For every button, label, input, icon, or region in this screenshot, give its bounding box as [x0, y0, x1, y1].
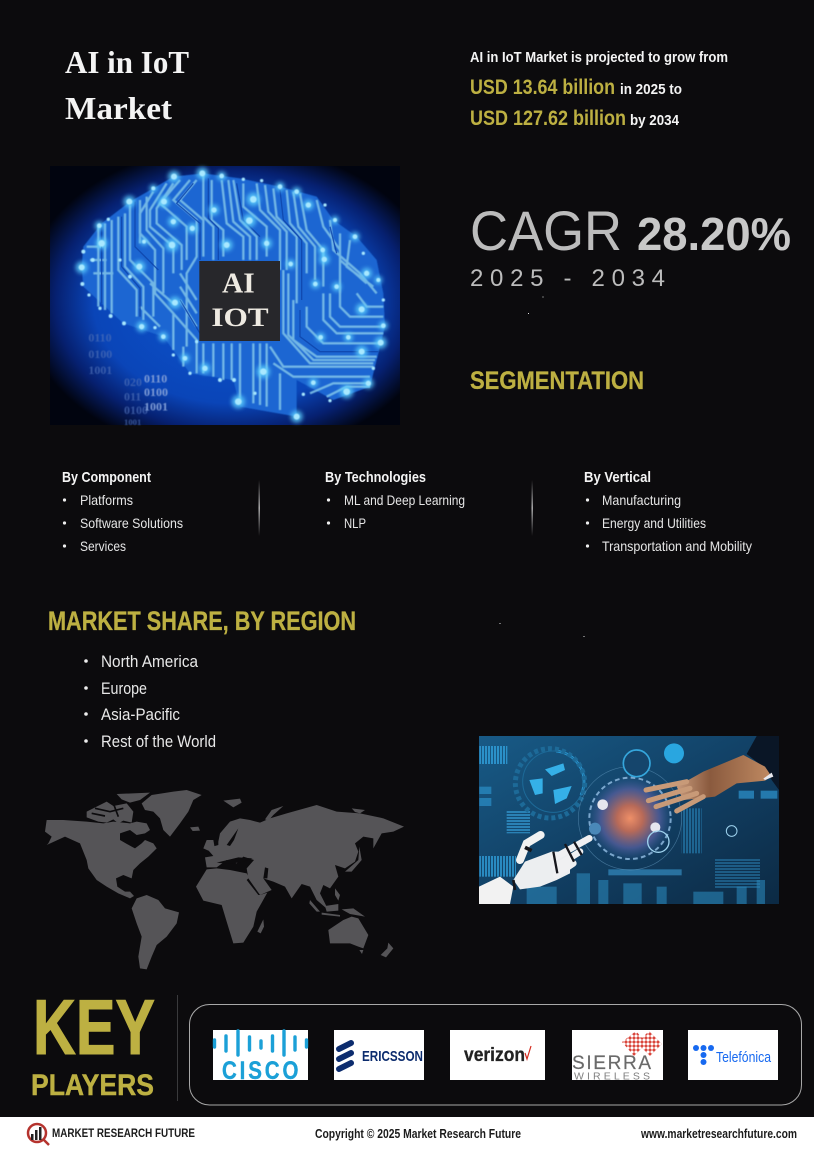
logo icon: [28, 1124, 49, 1145]
CAGR: 28.20%: [637, 208, 791, 260]
CAGR: 2025 - 2034: [470, 265, 665, 292]
key players heading: [31, 983, 155, 1102]
market share heading: MARKET SHARE, BY REGION: [48, 606, 356, 636]
market size summary: [470, 49, 728, 130]
title: AI in IoT: [65, 44, 189, 80]
logo: ericsson: [334, 1030, 424, 1080]
key players panel: [190, 1004, 802, 1105]
image: AI IoT circuit brain: 0110: [144, 372, 167, 386]
city skyline: [527, 873, 765, 904]
world map: [45, 790, 404, 969]
binary digits: [88, 331, 148, 427]
image: AI IoT circuit brain: [50, 166, 400, 427]
region list: North America: [101, 653, 199, 671]
title: [65, 44, 189, 126]
market size summary: USD 13.64 billion: [470, 76, 615, 99]
circuit traces: [87, 175, 383, 410]
segment: by component: Services: [80, 538, 126, 554]
binary digits: 1001: [124, 417, 141, 427]
segment: by component: [62, 469, 183, 554]
human hand: [646, 736, 779, 811]
market size summary: by 2034: [630, 112, 680, 129]
footer: Copyright © 2025 Market Research Future: [315, 1127, 521, 1141]
segment: by vertical: Transportation and Mobility: [602, 538, 752, 554]
region list: Europe: [101, 680, 147, 698]
region list: [84, 653, 216, 751]
africa: [196, 868, 267, 943]
binary digits: 1001: [88, 363, 112, 377]
logo: cisco: CISCO: [222, 1056, 301, 1084]
novaya zemlya: [265, 806, 283, 821]
binary digits: 0100: [124, 403, 148, 417]
title: Market: [65, 90, 172, 126]
south america: [132, 895, 179, 969]
logo: sierra wireless: SIERRA: [572, 1053, 651, 1074]
segment: by vertical: By Vertical: [584, 469, 651, 486]
image: robot and human hand: [479, 736, 779, 904]
CAGR: [470, 199, 791, 292]
segment: by component: Software Solutions: [80, 515, 183, 531]
tiny specks: [500, 296, 584, 637]
uk: [203, 840, 215, 851]
logo: telefonica: Telefónica: [716, 1049, 772, 1066]
segment: by technologies: ML and Deep Learning: [344, 492, 465, 508]
greenland: [142, 790, 202, 837]
binary digits: 0100: [88, 347, 112, 361]
AI IOT chip label: [199, 261, 280, 341]
segment: by vertical: Manufacturing: [602, 492, 681, 508]
segment: by technologies: NLP: [344, 515, 366, 531]
footer: MARKET RESEARCH FUTURE: [52, 1126, 195, 1140]
binary digits: 011: [124, 390, 141, 404]
market size summary: USD 127.62 billion: [470, 107, 626, 130]
region list: Rest of the World: [101, 733, 216, 751]
logo: verizon: [450, 1030, 545, 1080]
footer: [0, 1117, 814, 1150]
AI IOT chip label: IOT: [211, 302, 269, 332]
segmentation heading: SEGMENTATION: [470, 367, 644, 395]
sea gaps: [217, 828, 268, 895]
segment: by component: By Component: [62, 469, 151, 486]
image: AI IoT circuit brain: 1001: [144, 400, 168, 414]
logo: sierra wireless: WIRELESS: [574, 1070, 650, 1082]
east siberian islands: [352, 808, 365, 813]
logo: sierra wireless: [572, 1030, 663, 1082]
key players heading: PLAYERS: [31, 1069, 154, 1102]
tasmania: [359, 950, 363, 954]
robot hand: [479, 835, 589, 904]
logo: ericsson: ERICSSON: [362, 1048, 423, 1065]
binary digits: 020: [124, 375, 142, 389]
eurasia: [205, 805, 404, 910]
AI IOT chip label: AI: [222, 269, 255, 300]
new zealand: [381, 943, 393, 957]
segment: by vertical: [584, 469, 752, 554]
philippines: [335, 888, 340, 901]
radial gauge: [515, 746, 589, 818]
indonesia: [309, 900, 365, 917]
svalbard: [223, 799, 242, 807]
north america: [45, 820, 157, 898]
japan: [345, 847, 362, 872]
australia: [328, 917, 368, 948]
segment: by technologies: [325, 469, 465, 531]
key players heading: KEY: [33, 983, 155, 1071]
holographic orb: [578, 750, 737, 870]
logo: cisco: [213, 1030, 308, 1084]
iceland: [190, 827, 200, 831]
image: AI IoT circuit brain: 0100: [144, 385, 168, 399]
logo: telefonica: [688, 1030, 778, 1080]
market size summary: AI in IoT Market is projected to grow from: [470, 49, 728, 66]
segment: by technologies: By Technologies: [325, 469, 426, 486]
segment: by component: Platforms: [80, 492, 133, 508]
logo: verizon: verizon: [464, 1045, 525, 1066]
binary digits: 0110: [88, 331, 112, 345]
madagascar: [257, 919, 264, 933]
region list: Asia-Pacific: [101, 706, 180, 724]
dashboard widgets: [479, 743, 777, 888]
segment: by vertical: Energy and Utilities: [602, 515, 706, 531]
market size summary: in 2025 to: [620, 81, 682, 98]
arctic islands: [87, 802, 133, 823]
brain silhouette: [82, 173, 385, 417]
CAGR: CAGR: [470, 199, 622, 262]
glowing nodes: [76, 167, 388, 423]
